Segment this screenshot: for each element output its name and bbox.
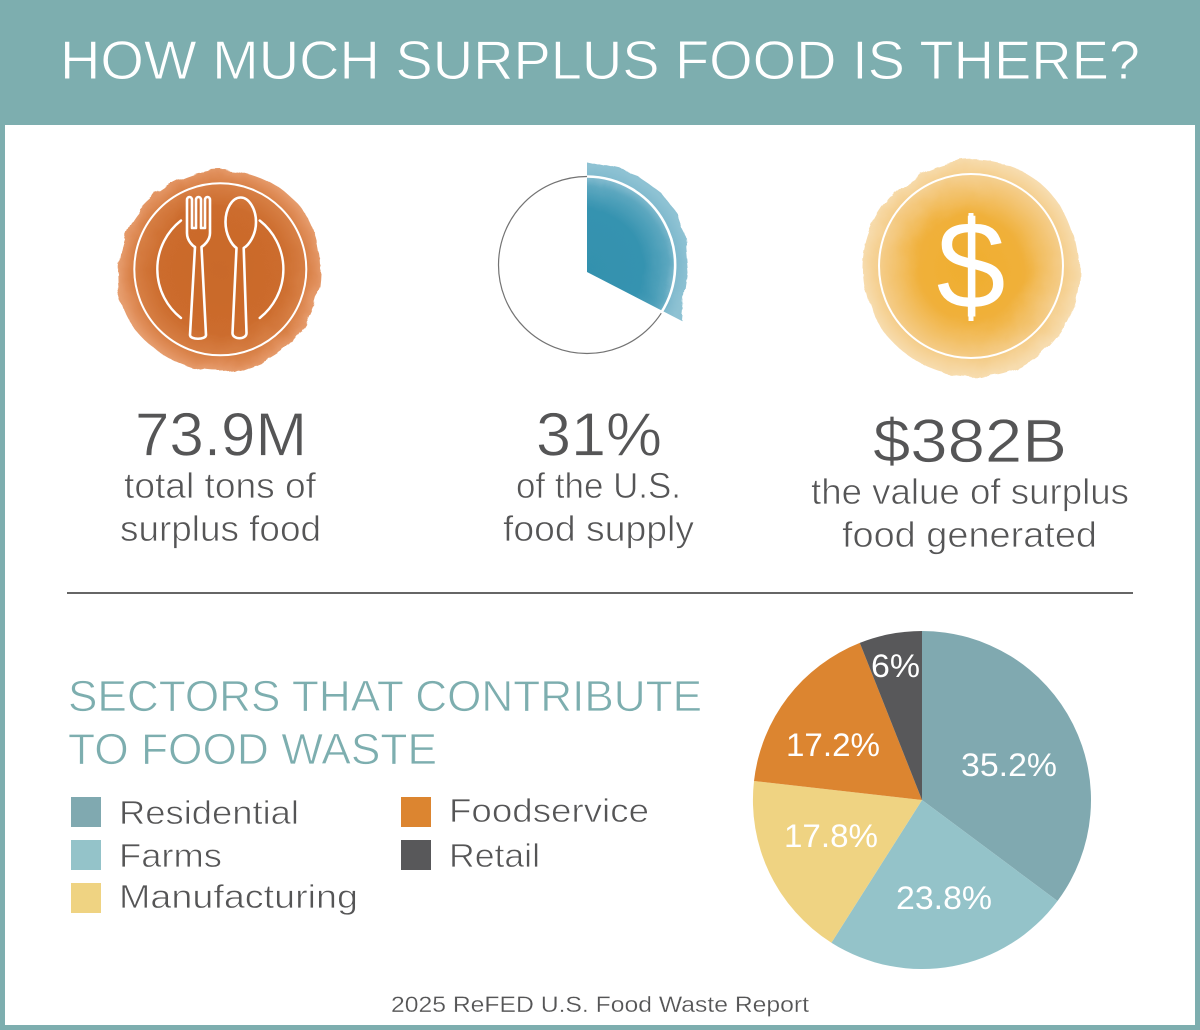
stat: total tons: 73.9M — [135, 400, 307, 468]
title: HOW MUCH SURPLUS FOOD IS THERE? — [60, 29, 1140, 91]
pie chart: 17.2% — [786, 727, 880, 763]
stat: share of food supply: food supply — [503, 508, 694, 549]
stat: value of surplus — [811, 407, 1129, 555]
pie chart: 17.8% — [784, 818, 878, 854]
legend: Retail — [449, 837, 540, 874]
pie chart: 6% — [871, 648, 920, 684]
heading: sectors: TO FOOD WASTE — [68, 725, 437, 774]
legend: Farms — [119, 837, 222, 874]
legend: Foodservice — [449, 792, 649, 829]
stat: total tons — [120, 400, 321, 549]
icon: 31 percent pie wedge — [498, 162, 688, 354]
stat: total tons: surplus food — [120, 508, 321, 549]
legend — [71, 792, 649, 915]
legend: Manufacturing — [119, 878, 358, 915]
stat: total tons: total tons of — [124, 465, 317, 506]
pie chart: 35.2% — [961, 747, 1057, 783]
stat: value of surplus: food generated — [842, 514, 1097, 555]
source footer: 2025 ReFED U.S. Food Waste Report — [391, 992, 809, 1017]
icon: plate and cutlery on orange watercolor — [118, 170, 320, 372]
heading: sectors: SECTORS THAT CONTRIBUTE — [68, 672, 702, 721]
pie chart — [753, 631, 1091, 969]
heading: sectors — [68, 672, 702, 774]
legend: Residential — [119, 794, 299, 831]
stat: share of food supply: 31% — [536, 400, 662, 468]
stat: share of food supply — [503, 400, 694, 549]
stat: share of food supply: of the U.S. — [516, 465, 681, 506]
stat: value of surplus: $382B — [873, 407, 1067, 475]
stat: value of surplus: the value of surplus — [811, 471, 1129, 512]
icon: dollar sign on gold watercolor — [863, 161, 1078, 377]
pie chart: 23.8% — [896, 880, 992, 916]
icon: dollar sign on gold watercolor: $ — [937, 197, 1005, 335]
